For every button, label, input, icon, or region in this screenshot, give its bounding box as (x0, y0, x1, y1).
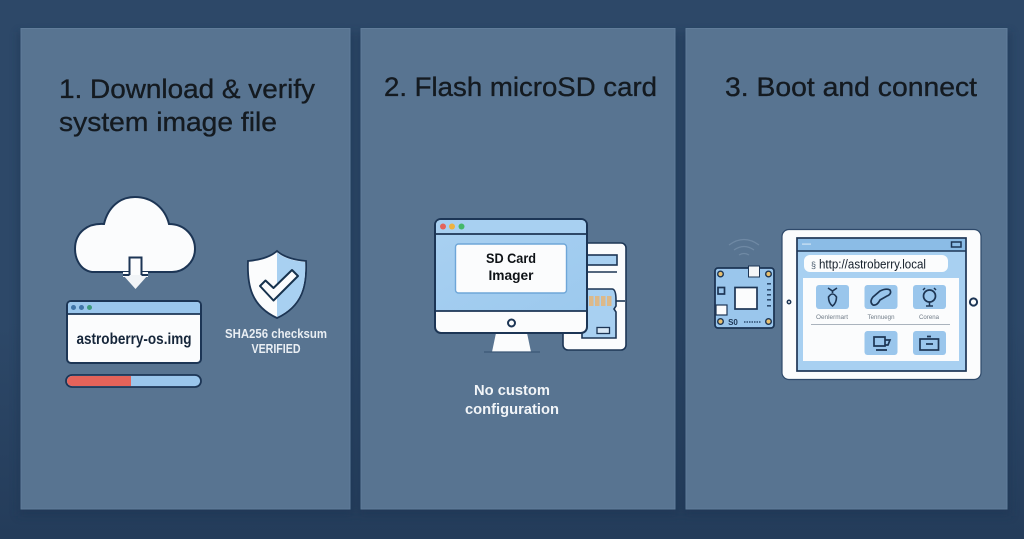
heading: step 3: 3. Boot and connect (725, 72, 978, 102)
checksum caption (225, 327, 327, 356)
app tile: Oenlemart: Oenlermart (816, 314, 848, 321)
app tile: Corena: Corena (919, 314, 939, 321)
app tile: monitor (864, 331, 898, 355)
app tile: Corena (913, 285, 946, 321)
heading: step 1: system image file (59, 107, 277, 137)
address bar (804, 255, 948, 272)
app tile: folder (913, 331, 946, 355)
dialog label (486, 250, 536, 283)
progress bar (66, 375, 201, 387)
icon: cloud with download arrow (75, 197, 195, 289)
back card with microSD (563, 243, 626, 350)
address bar: http://astroberry.local (819, 258, 926, 272)
file window (67, 301, 201, 363)
heading: step 1 (59, 74, 316, 137)
panel: step 2 flash microSD card (361, 28, 675, 509)
icon: shield with check (248, 251, 306, 318)
heading: step 2: 2. Flash microSD card (384, 72, 657, 102)
filename: astroberry-os.img (76, 331, 192, 348)
icon: tablet showing web interface (782, 230, 981, 380)
icon: desktop monitor (435, 219, 587, 352)
app tile: Oenlemart (816, 285, 849, 321)
dialog label: SD Card (486, 250, 536, 266)
checksum caption: VERIFIED (252, 342, 300, 356)
address bar: § (811, 260, 816, 270)
heading: step 1: 1. Download & verify (59, 74, 316, 104)
app tile: Tennuegn (864, 285, 898, 321)
icon: wifi waves (729, 240, 759, 255)
panel: step 3 boot and connect (686, 28, 1007, 509)
checksum caption: SHA256 checksum (225, 327, 327, 341)
caption: no custom configuration: No custom (474, 382, 550, 399)
icon: single-board computer (715, 266, 774, 328)
panel: step 1 download and verify (21, 28, 350, 509)
caption: no custom configuration: configuration (465, 401, 559, 418)
dialog label: Imager (488, 267, 534, 283)
app tile: Tennuegn: Tennuegn (868, 314, 895, 321)
icon: single-board computer: S0 (728, 318, 738, 327)
caption: no custom configuration (465, 382, 559, 418)
